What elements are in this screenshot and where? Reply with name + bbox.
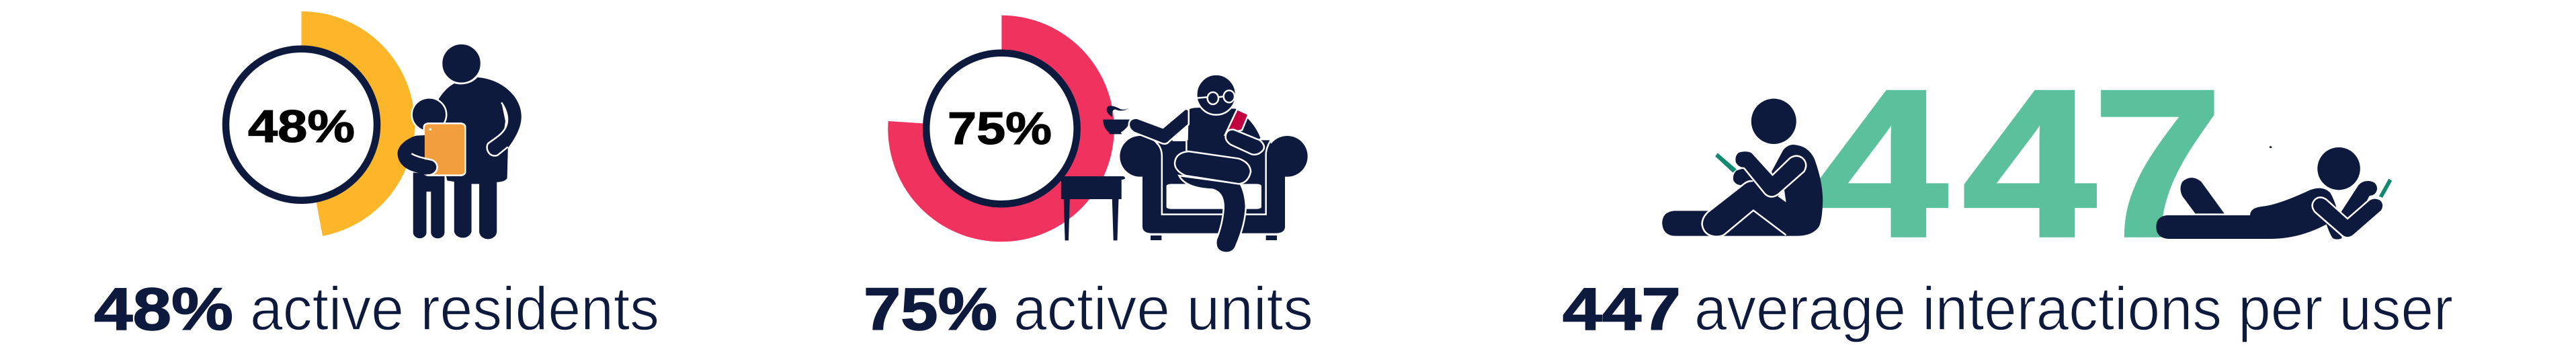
head (2317, 147, 2360, 190)
side table (1061, 176, 1125, 240)
right lens (1224, 90, 1235, 102)
donut arc: 48% (301, 11, 415, 236)
panel: active residents (94, 11, 659, 343)
tablet camera (429, 129, 431, 131)
lower hand (1733, 168, 1753, 185)
child arm outline (411, 153, 438, 175)
donut value: 48% (248, 101, 355, 152)
arm gap (1778, 190, 1786, 203)
phone (2379, 179, 2392, 198)
lower leg (1179, 176, 1246, 253)
caption label: average interactions per user (1694, 275, 2453, 343)
adult arm gap (501, 102, 507, 130)
seat cushion (1167, 184, 1261, 209)
stray dot (2270, 146, 2272, 148)
caption (94, 275, 659, 343)
arm (2313, 197, 2383, 238)
chair outline (1157, 141, 1270, 215)
armchair (1120, 136, 1308, 240)
glasses (1198, 90, 1235, 104)
extended arm (1129, 109, 1189, 144)
upper forearm (2341, 181, 2377, 218)
digit: 4 (1962, 46, 2097, 280)
knee outline (1702, 181, 1786, 237)
torso (1188, 108, 1260, 158)
digit: 7 (2093, 46, 2222, 280)
digit: 4 (1814, 46, 1949, 280)
icon: seated person with phone (1662, 99, 1823, 237)
caption value: 75% (864, 275, 997, 342)
head (1196, 75, 1236, 115)
thigh (1175, 151, 1251, 184)
donut centre circle (226, 49, 377, 201)
back outline (1173, 141, 1186, 151)
right armrest (1267, 136, 1308, 177)
chair base (1142, 140, 1285, 233)
left armrest (1120, 136, 1161, 177)
body (2156, 188, 2342, 240)
caption label: active units (1013, 275, 1313, 343)
right foot (1266, 235, 1277, 240)
forearm (1226, 130, 1264, 155)
caption value: 447 (1563, 275, 1681, 342)
teacup (1103, 120, 1130, 134)
child arm (398, 135, 438, 175)
child legs (412, 172, 446, 240)
panel: average interactions (1563, 46, 2453, 343)
icon: person lying down with phone (2156, 146, 2392, 240)
caption (1563, 275, 2453, 343)
donut value: 75% (948, 103, 1052, 154)
phone (1715, 153, 1737, 173)
adult head (442, 44, 481, 83)
steam (1107, 106, 1128, 117)
child head (412, 98, 446, 131)
icon: person in armchair with tea and phone (1061, 75, 1308, 253)
donut arc: 75% (888, 15, 1114, 242)
glasses arm (1198, 96, 1224, 98)
icon: adult and child with tablet (398, 44, 522, 240)
left lens (1208, 92, 1218, 104)
left foot (1151, 235, 1161, 240)
caption value: 48% (94, 275, 233, 342)
tablet (424, 123, 465, 176)
adult arm outline (487, 102, 508, 156)
head (1751, 99, 1796, 144)
adult body (427, 77, 522, 239)
caption (864, 275, 1313, 343)
panel: active units (864, 15, 1313, 343)
raised lower leg (2180, 178, 2225, 213)
caption label: active residents (250, 275, 659, 343)
donut centre circle (926, 53, 1077, 204)
body and legs (1662, 145, 1823, 236)
phone (1225, 109, 1249, 135)
large number (1814, 46, 2222, 280)
arms (1735, 151, 1806, 196)
